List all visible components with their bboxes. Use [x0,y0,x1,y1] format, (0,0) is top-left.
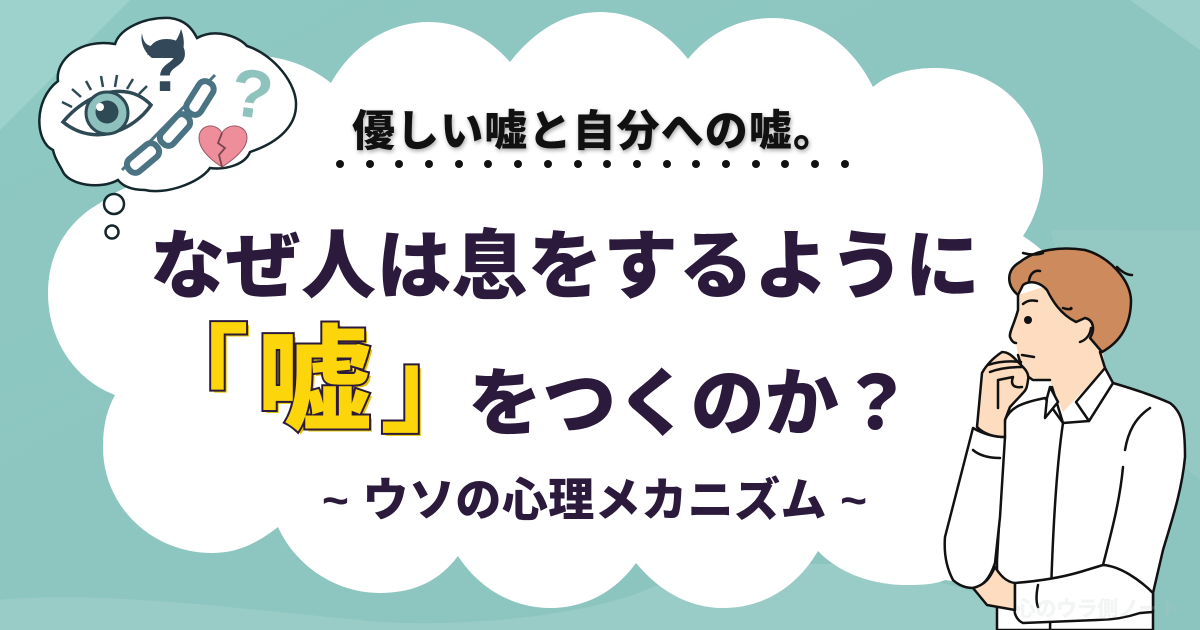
eye [1024,316,1032,324]
main title line 2: をつくのか？ [468,362,913,445]
hair [1009,248,1131,352]
main title line 1: なぜ人は息をするように [150,224,980,308]
hair strands [1023,253,1132,342]
icon: broken heart [199,126,247,167]
icon: chain [122,75,216,176]
collar [1045,368,1113,421]
watermark: 心のウラ側ノート [1015,598,1180,621]
subheading: 優しい嘘と自分への嘘。 [352,108,836,156]
highlighted word: kyo [144,318,488,449]
hand at chin [977,352,1028,437]
kanji: 嘘 [257,318,372,446]
icon: eye [62,75,151,135]
neck and face [1010,285,1105,412]
icon: devil question mark: ? [144,24,189,107]
closing bracket: 」 [380,329,485,446]
lower sleeve [1015,565,1153,623]
man illustration [945,248,1185,630]
icon: teal question mark: ? [226,54,278,135]
cuff line [1036,585,1038,607]
fingers [988,361,1022,408]
subtitle: ~ ウソの心理メカニズム ~ [322,474,867,526]
kanji: 嘘 [260,321,375,449]
shirt body [997,383,1185,630]
thought bubble [39,18,296,239]
small bubble small [106,226,118,238]
raised sleeve [945,428,1005,588]
small bubble large [104,194,124,214]
face lines [1010,295,1105,423]
opening bracket: 「 [144,318,249,435]
placket and folds [1050,408,1150,630]
dotted divider [336,160,849,168]
opening bracket: 「 [147,321,252,438]
closing bracket: 」 [383,332,488,449]
lower hand [973,567,1015,610]
